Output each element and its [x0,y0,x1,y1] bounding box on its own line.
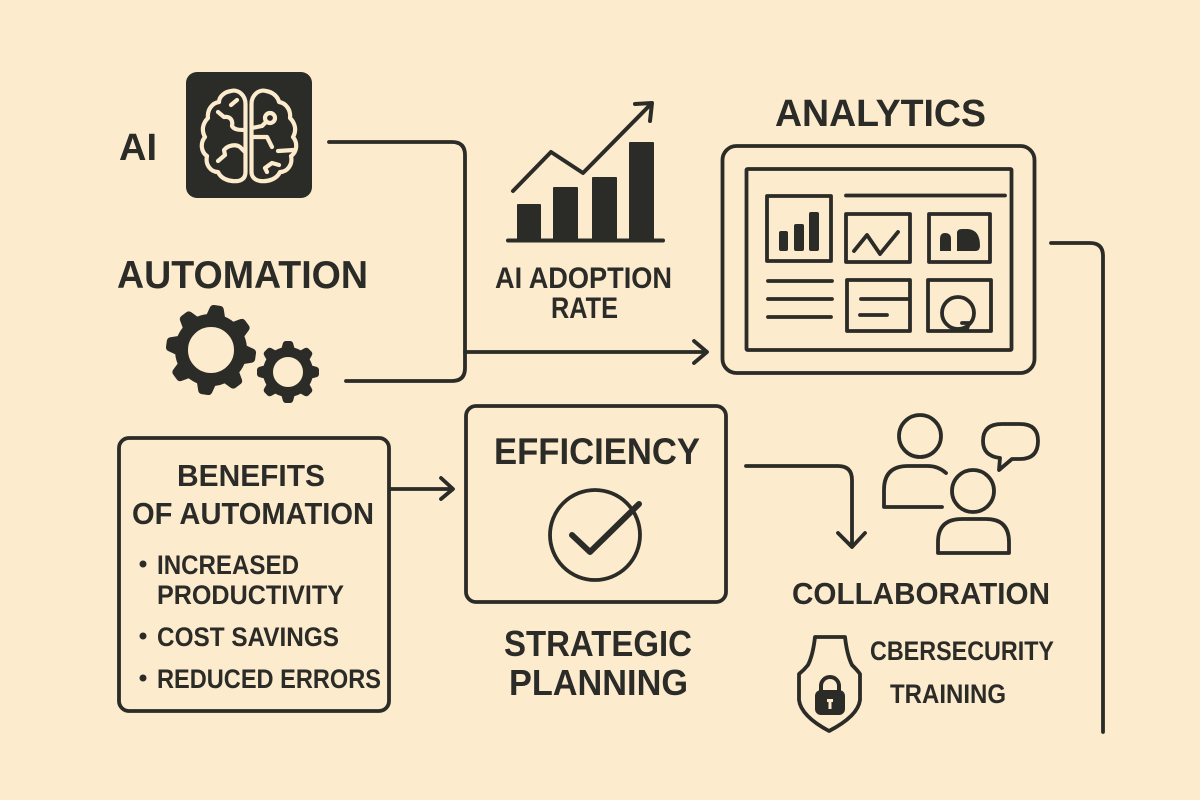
icon: small gear [257,341,319,403]
panel: efficiency [466,406,726,602]
panel: analytics dashboard [722,146,1034,373]
label: AI adoption rate: AI ADOPTION [495,262,672,295]
label: collaboration: COLLABORATION [792,576,1050,611]
heading: analytics: ANALYTICS [775,93,986,135]
label: automation: AUTOMATION [117,254,368,297]
dashboard: text lines [768,281,832,317]
bullet: increased productivity: PRODUCTIVITY [157,580,344,610]
bullet: reduced errors: REDUCED ERRORS [157,664,381,694]
connector: AI and automation to analytics [329,142,707,381]
arrow: benefits to efficiency [390,478,453,499]
heading: benefits: BENEFITS [177,458,325,493]
icon: gears [165,304,319,403]
dashboard: line tile [846,214,910,262]
icon: person one [884,415,946,507]
dashboard: text tile [847,280,910,331]
label: planning: PLANNING [509,662,688,703]
panel: benefits of automation [119,438,389,711]
dashboard: ring tile [928,280,991,331]
icon: shield with padlock [799,637,860,731]
label: training: TRAINING [890,679,1006,709]
bullet: increased productivity: INCREASED [157,550,299,580]
icon: large gear [165,304,257,396]
connector: analytics side line [1051,243,1103,732]
dashboard: shapes tile [929,214,990,262]
icon: collaboration people and speech bubble [884,415,1038,553]
chart: AI adoption rate bars and trend arrow [508,103,663,241]
label: AI: AI [119,127,157,169]
label: cybersecurity: CBERSECURITY [870,636,1054,666]
heading: efficiency: EFFICIENCY [494,431,700,472]
icon: check circle [550,490,640,580]
bullet: increased productivity [140,550,344,610]
dashboard: bar tile [767,196,831,261]
dashboard: header rule [846,194,1005,197]
arrow: efficiency to collaboration [746,466,865,547]
icon: brain in dark square [186,72,312,198]
heading: of automation: OF AUTOMATION [132,496,374,531]
icon: speech bubble [983,424,1038,470]
bullet: cost savings: COST SAVINGS [157,622,339,652]
label: rate: RATE [551,292,618,325]
label: strategic: STRATEGIC [504,623,692,664]
icon: person two [938,470,1009,553]
